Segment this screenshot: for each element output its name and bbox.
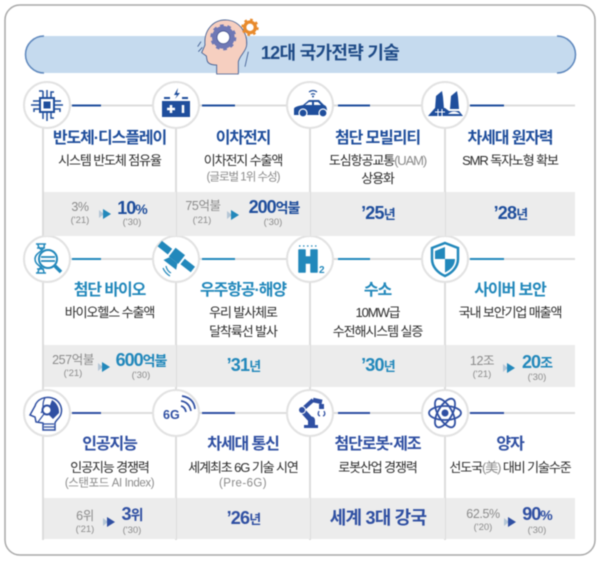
metric band: ('30) (528, 372, 546, 383)
metric band (446, 498, 575, 539)
metric band: 10% (117, 198, 147, 218)
description: 로봇산업 경쟁력 (338, 460, 417, 475)
heading: 사이버 보안 (474, 282, 546, 299)
metric band (44, 192, 176, 236)
heading: 차세대 통신 (207, 436, 279, 453)
metric band (177, 345, 310, 387)
metric band: ('30) (132, 370, 150, 381)
description line 2: 수전해시스템 실증 (333, 324, 422, 339)
description line 2: 달착륙선 발사 (209, 324, 277, 339)
metric band: ('21) (76, 524, 94, 535)
metric band: ’30년 (361, 355, 395, 375)
icon: connected car (286, 80, 334, 129)
title banner (24, 34, 577, 74)
metric band: 90% (522, 504, 552, 524)
metric band: 62.5% (466, 507, 500, 521)
description: 10MW급 (355, 305, 400, 320)
heading: 반도체·디스플레이 (53, 130, 166, 147)
heading: 인공지능 (82, 436, 137, 453)
note: (Pre-6G) (219, 478, 267, 490)
metric band: ('30) (123, 217, 141, 228)
icon: head with gears (197, 18, 260, 76)
icon: battery (152, 80, 200, 129)
icon: DNA magnifier (22, 236, 71, 284)
description: 도심항공교통(UAM) (329, 153, 426, 168)
icon: AI head (22, 388, 71, 438)
metric band: 3% (71, 200, 89, 214)
metric band: ’26년 (227, 508, 260, 528)
metric band (44, 498, 176, 539)
description: 국내 보안기업 매출액 (459, 305, 561, 320)
icon: 6G signal: 6G (163, 408, 180, 422)
description line 2: 상용화 (361, 171, 394, 186)
note: (스탠포드 AI Index) (65, 478, 154, 490)
description: 세계최초 6G 기술 시연 (188, 460, 298, 475)
panel: semiconductor and display (44, 128, 174, 236)
heading: 수소 (364, 282, 391, 299)
description: 이차전지 수출액 (204, 153, 282, 168)
icon: atom (421, 389, 469, 437)
metric band: 200억불 (249, 197, 299, 217)
heading: 이차전지 (216, 130, 270, 147)
icon: 6G signal (152, 389, 200, 437)
description: 시스템 반도체 점유율 (58, 153, 161, 168)
metric band (446, 345, 575, 387)
metric band: ('21) (473, 369, 491, 380)
metric band: ’25년 (361, 203, 395, 223)
metric band (311, 345, 445, 387)
icon: nuclear plant (420, 80, 470, 129)
panel: cyber security (446, 280, 575, 387)
icon: hydrogen H2: 2 (319, 265, 325, 276)
heading: title: 12대 국가전략 기술 (261, 43, 399, 63)
metric band: ’31년 (227, 355, 260, 375)
metric band: 20조 (522, 352, 552, 372)
heading: 첨단 바이오 (74, 282, 145, 299)
metric band: 257억불 (52, 353, 94, 367)
metric band: ('30) (123, 525, 141, 536)
note: (글로벌 1위 수성) (207, 172, 279, 184)
metric band (311, 498, 445, 539)
panel: aerospace and ocean (177, 280, 308, 387)
metric band: 75억불 (185, 199, 221, 213)
icon: shield (421, 236, 469, 283)
metric band: 600억불 (116, 350, 166, 370)
metric band (311, 192, 445, 236)
panel: secondary battery (177, 128, 308, 236)
panel: quantum (446, 434, 575, 539)
metric band: ('21) (71, 215, 89, 226)
panel: hydrogen (311, 281, 444, 387)
metric band: 세계 3대 강국 (330, 508, 426, 528)
panel: advanced robotics and manufacturing (311, 434, 444, 539)
icon: satellite (152, 236, 200, 283)
heading: 첨단로봇·제조 (335, 436, 420, 453)
description: 우리 발사체로 (209, 305, 277, 320)
icon: robot arm (286, 389, 334, 437)
heading: 양자 (496, 436, 524, 453)
metric band: ('30) (264, 217, 282, 228)
panel: artificial intelligence (44, 434, 174, 539)
description: 바이오헬스 수출액 (65, 305, 154, 320)
metric band (44, 345, 176, 387)
description: SMR 독자노형 확보 (462, 153, 558, 168)
metric band: ('21) (193, 215, 211, 226)
heading: 우주항공·해양 (200, 282, 286, 299)
metric band: 6위 (76, 509, 94, 523)
icon: semiconductor chip (22, 80, 72, 130)
panel: advanced bio (44, 280, 174, 387)
icon: hydrogen H2 (286, 236, 334, 283)
metric band (446, 192, 575, 236)
metric band: 3위 (122, 504, 142, 524)
panel: next generation nuclear (446, 128, 575, 236)
description: 선도국(美) 대비 기술수준 (449, 460, 571, 475)
panel: next generation communication (177, 434, 308, 539)
metric band (177, 498, 310, 539)
metric band: 12조 (470, 354, 494, 368)
panel: advanced mobility (311, 128, 444, 236)
metric band: ’28년 (494, 203, 527, 223)
description: 인공지능 경쟁력 (70, 460, 149, 475)
metric band (177, 192, 310, 236)
metric band: ('21) (64, 368, 82, 379)
metric band: ('30) (528, 525, 546, 536)
heading: 차세대 원자력 (467, 130, 553, 147)
heading: 첨단 모빌리티 (335, 130, 420, 147)
metric band: ('20) (474, 522, 492, 533)
